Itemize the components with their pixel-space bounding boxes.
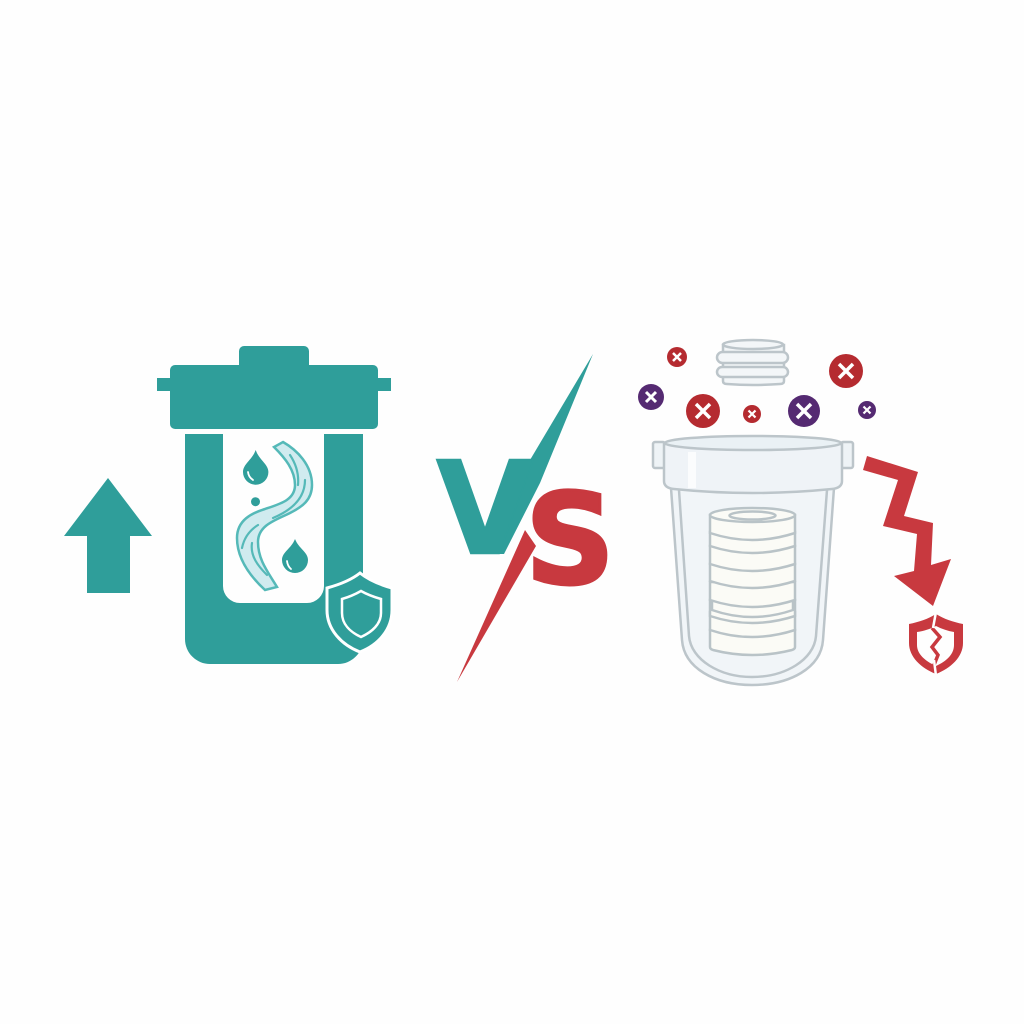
water droplet: lower [282, 539, 308, 573]
VS badge [436, 354, 615, 682]
icon: broken shield [909, 612, 963, 676]
housing inner wall [679, 490, 827, 677]
icon: clear plastic filter housing [653, 436, 853, 685]
red swoosh [457, 530, 536, 682]
letter S: S [525, 466, 615, 613]
particle: red tiny [743, 405, 761, 423]
icon: red jagged down arrow [863, 456, 951, 606]
cartridge filter stack [710, 508, 795, 655]
filter lid [157, 346, 391, 429]
water dot [251, 497, 260, 506]
housing rim [665, 436, 841, 450]
icon: detached threaded bottle neck [717, 340, 788, 385]
housing cup [671, 488, 834, 685]
particle: red small [667, 347, 687, 367]
icon: premium teal filter housing [157, 346, 392, 664]
filter body with window [185, 434, 363, 664]
icon: protection shield [327, 573, 392, 652]
teal swoosh [498, 354, 593, 554]
particle: purple tiny [858, 401, 876, 419]
particle: purple large [788, 395, 820, 427]
icon: teal up arrow [64, 478, 152, 593]
water droplet: upper [243, 450, 268, 485]
housing side tabs [653, 442, 853, 468]
particle: red upper right [829, 354, 863, 388]
housing collar [664, 444, 842, 493]
particle: red large [686, 394, 720, 428]
particle: purple [638, 384, 664, 410]
water stream [237, 442, 312, 590]
collar highlight [688, 452, 696, 488]
letter V: V [436, 434, 534, 584]
icon: contaminant particles [638, 347, 876, 428]
